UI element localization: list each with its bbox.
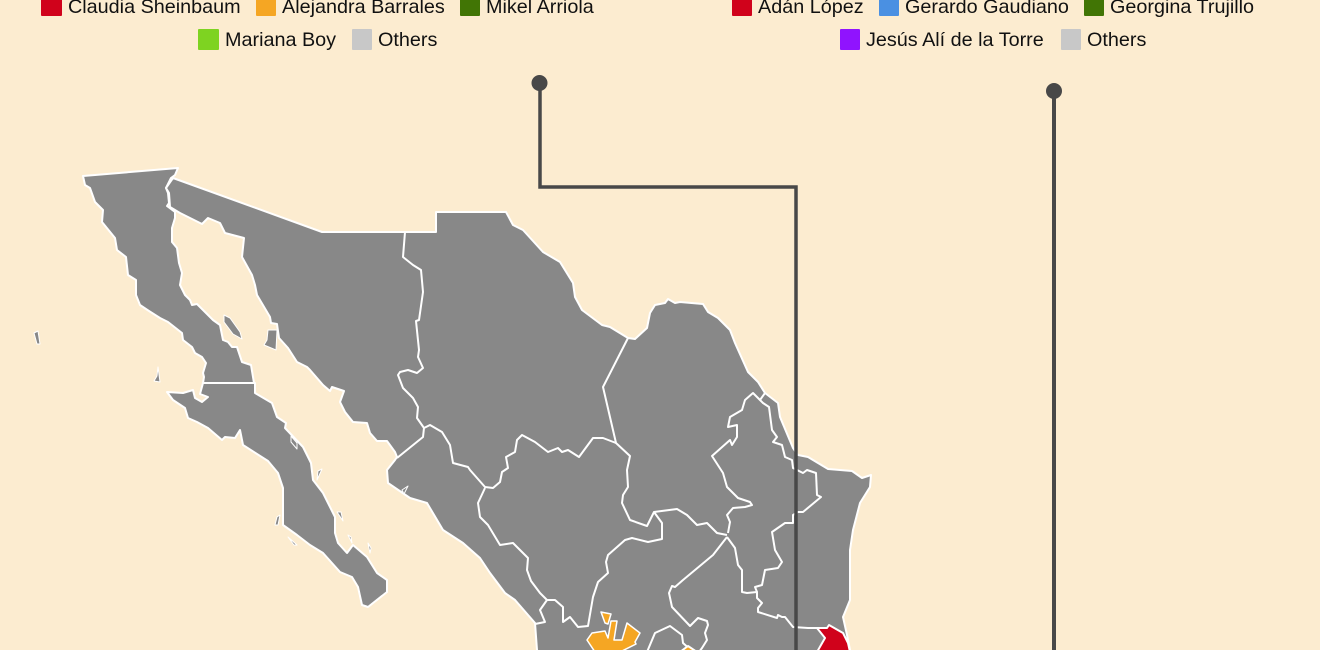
small orange area won by Alejandra Barrales <box>680 646 697 650</box>
state: Baja California <box>83 168 254 383</box>
legend: right race candidates: Others <box>1087 29 1146 51</box>
legend: left race candidates: Others <box>378 29 437 51</box>
connector line: left race to map <box>532 75 796 650</box>
legend: right race candidates: Jesús Alí de la Torre <box>866 29 1044 51</box>
state: Veracruz segment won by Adán López <box>817 625 850 650</box>
connector line: right race to map <box>1046 83 1062 650</box>
state: Baja California Sur <box>167 383 387 607</box>
connector dot: right race <box>1046 83 1062 99</box>
islands off the Pacific and Gulf coasts <box>34 315 408 553</box>
mainland Mexico <box>166 178 871 650</box>
legend: left race candidates: Mariana Boy <box>225 29 336 51</box>
legend: left race candidates <box>41 0 594 51</box>
state: Jalisco-area municipalities won by Alejandra Barrales <box>587 612 640 650</box>
legend: right race candidates <box>732 0 1254 51</box>
connector dot: left race <box>532 75 548 91</box>
state borders <box>397 232 821 650</box>
map of Mexico by state <box>34 168 871 650</box>
